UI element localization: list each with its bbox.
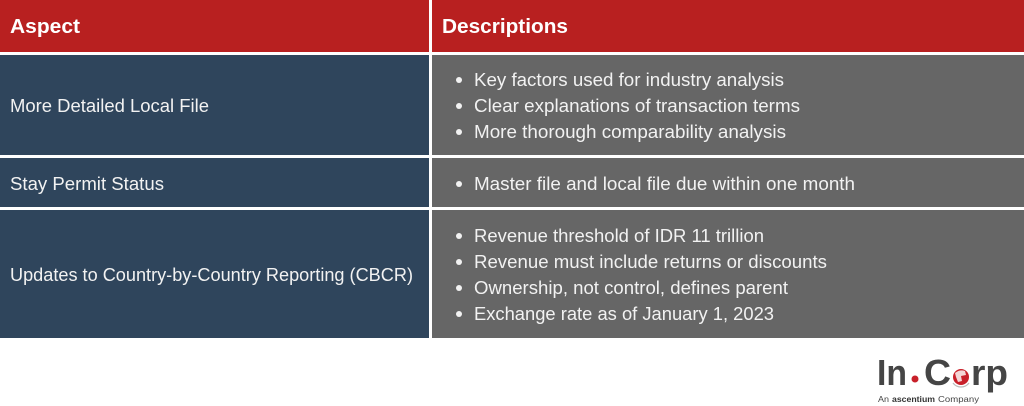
row 3 descriptions xyxy=(432,210,1024,338)
table header: Aspect xyxy=(0,0,429,52)
logo: InCorp, An Ascentium Company: rp xyxy=(971,352,1008,393)
row 3 aspect: Updates to CBCR xyxy=(0,210,429,338)
table header: Descriptions: Descriptions xyxy=(442,16,568,38)
logo: InCorp, An Ascentium Company xyxy=(877,352,1008,404)
row 1 aspect: More Detailed Local File xyxy=(0,55,429,155)
row 2 descriptions: Master file and local file due within one month xyxy=(474,174,855,194)
logo: InCorp, An Ascentium Company: In xyxy=(877,352,907,393)
row 1 descriptions: More thorough comparability analysis xyxy=(474,122,786,142)
logo: InCorp, An Ascentium Company: An xyxy=(878,394,889,404)
row 1 aspect: More Detailed Local File: More Detailed Local File xyxy=(10,96,209,116)
row 3 descriptions: Revenue threshold of IDR 11 trillion xyxy=(474,226,764,246)
row 2 descriptions xyxy=(432,158,1024,207)
row 2 aspect: Stay Permit Status xyxy=(0,158,429,207)
row 3 descriptions: Ownership, not control, defines parent xyxy=(474,278,788,298)
logo: InCorp, An Ascentium Company: Company xyxy=(938,394,980,404)
table header: Descriptions xyxy=(432,0,1024,52)
logo: InCorp, An Ascentium Company: ascentium xyxy=(892,394,935,404)
row 3 aspect: Updates to CBCR: Updates to Country-by-Country Reporting (CBCR) xyxy=(10,265,413,285)
row 3 descriptions: Revenue must include returns or discounts xyxy=(474,252,827,272)
table header: Aspect: Aspect xyxy=(10,16,80,38)
row 1 descriptions: Key factors used for industry analysis xyxy=(474,70,784,90)
row 2 aspect: Stay Permit Status: Stay Permit Status xyxy=(10,174,164,194)
row 3 descriptions: Exchange rate as of January 1, 2023 xyxy=(474,304,774,324)
row 1 descriptions xyxy=(432,55,1024,155)
logo: InCorp, An Ascentium Company: C xyxy=(924,352,951,393)
row 1 descriptions: Clear explanations of transaction terms xyxy=(474,96,800,116)
